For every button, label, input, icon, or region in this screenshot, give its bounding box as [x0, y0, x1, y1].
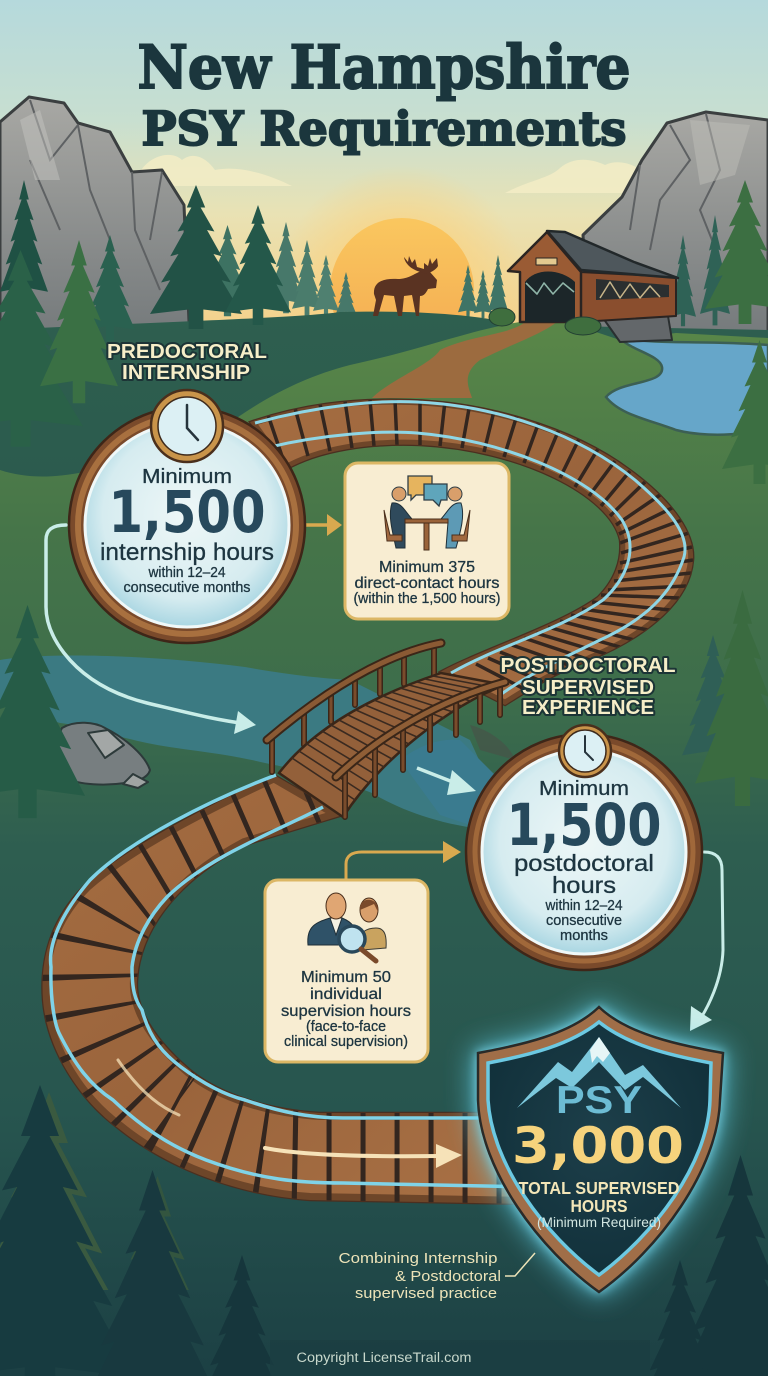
icon: shield mountain: [517, 1037, 681, 1108]
text: individual supervision hours: supervision hours: [281, 1003, 411, 1020]
foreground trees: [0, 1085, 768, 1376]
clouds: [140, 155, 650, 193]
number: 1,500 postdoctoral: 1,500: [506, 791, 662, 859]
arrow: supervision card to postdoctoral: [346, 841, 461, 880]
arrow: internship to direct contact: [306, 514, 342, 536]
dirt trail: [372, 322, 557, 398]
heading: section label postdoctoral supervised experience: EXPERIENCE: [522, 697, 654, 719]
heading: section label predoctoral internship: [107, 341, 267, 384]
mountain: right cliff: [583, 112, 768, 345]
heading: section label postdoctoral supervised experience: POSTDOCTORAL: [500, 655, 676, 677]
meadow field: [0, 320, 768, 1376]
text: postdoctoral hours: postdoctoral: [514, 850, 654, 876]
text: individual supervision hours: (face-to-face: [306, 1018, 386, 1035]
text: postdoctoral minimum: Minimum: [539, 778, 629, 800]
text: direct-contact hours: direct-contact hours: [354, 575, 500, 592]
text: direct-contact hours: [354, 559, 500, 607]
sky background: [0, 0, 768, 345]
text: direct-contact hours: Minimum 375: [379, 559, 475, 576]
panel: postdoctoral circle: [466, 725, 702, 970]
callout: combining internship and postdoctoral: supervised practice: [355, 1285, 497, 1302]
icon: two people at table: [384, 476, 470, 550]
text: total supervised hours: TOTAL SUPERVISED: [518, 1178, 680, 1198]
text: PSY: PSY: [556, 1079, 642, 1122]
middle river: [0, 656, 520, 850]
river top right: [606, 338, 768, 436]
panel: individual supervision card: [265, 880, 428, 1062]
text: total supervised hours: HOURS: [570, 1196, 628, 1216]
forest on left hill: [0, 180, 291, 447]
text: internship hours: within 12–24: [148, 565, 226, 581]
forest on right edge: [705, 180, 768, 324]
side trees: [0, 340, 768, 818]
wooden road: upper section: [250, 400, 693, 705]
text: postdoctoral hours: [514, 850, 654, 944]
text: internship minimum: Minimum: [142, 465, 232, 488]
arrow: postdoctoral to shield: [690, 852, 723, 1031]
arrows on the road: [118, 1060, 462, 1168]
text: individual supervision hours: [281, 969, 411, 1050]
text: total supervised hours: [518, 1178, 680, 1230]
footer band: [270, 1340, 650, 1376]
text: postdoctoral hours: consecutive: [546, 913, 622, 929]
heading: section label postdoctoral supervised experience: [500, 655, 676, 719]
text: direct-contact hours: (within the 1,500 hours): [354, 590, 500, 607]
title: PSY Requirements: [142, 102, 626, 157]
text: postdoctoral hours: months: [560, 928, 608, 944]
number: 3,000 total hours: 3,000: [512, 1117, 684, 1175]
icon: internship clock: [151, 390, 223, 462]
text: internship hours: internship hours: [100, 539, 274, 566]
mountain: left cliff: [0, 97, 190, 345]
number: 1,500 internship: 1,500: [108, 478, 266, 546]
dark hillside: [0, 312, 768, 1376]
arrow: bridge to postdoctoral: [417, 768, 476, 795]
heading: section label postdoctoral supervised experience: SUPERVISED: [522, 677, 654, 699]
text: individual supervision hours: clinical supervision): [284, 1033, 408, 1050]
sun: [277, 165, 527, 415]
icon: postdoctoral clock: [559, 725, 611, 777]
footer copyright: Copyright LicenseTrail.com: [296, 1350, 472, 1365]
heading: section label predoctoral internship: PREDOCTORAL: [107, 341, 267, 363]
badge: PSY shield: [478, 1007, 723, 1292]
wooden road: lower section: [42, 775, 530, 1204]
wooden footbridge: [267, 643, 505, 817]
title: [138, 33, 630, 157]
distant tree line: [205, 215, 730, 326]
icon: supervisor and magnifying glass: [308, 893, 386, 961]
callout: combining internship and postdoctoral: Combining Internship: [338, 1250, 498, 1267]
moose: [373, 256, 438, 316]
panel: internship circle: [69, 390, 305, 643]
callout: combining internship and postdoctoral: [338, 1250, 535, 1302]
heading: section label predoctoral internship: INTERNSHIP: [122, 362, 250, 384]
text: individual supervision hours: Minimum 50: [301, 969, 391, 986]
callout: combining internship and postdoctoral: & Postdoctoral: [395, 1268, 501, 1285]
text: internship hours: consecutive months: [124, 580, 250, 596]
arrow: internship curving to bridge: [46, 525, 256, 734]
text: total supervised hours: (Minimum Required): [537, 1215, 661, 1230]
boulder: [57, 723, 150, 788]
text: individual supervision hours: individual: [310, 986, 382, 1003]
text: internship hours: [100, 539, 274, 596]
text: postdoctoral hours: within 12–24: [545, 898, 622, 914]
covered bridge: [489, 231, 678, 342]
title: New Hampshire: [138, 33, 630, 103]
panel: direct-contact hours card: [345, 463, 509, 619]
text: postdoctoral hours: hours: [552, 872, 616, 898]
